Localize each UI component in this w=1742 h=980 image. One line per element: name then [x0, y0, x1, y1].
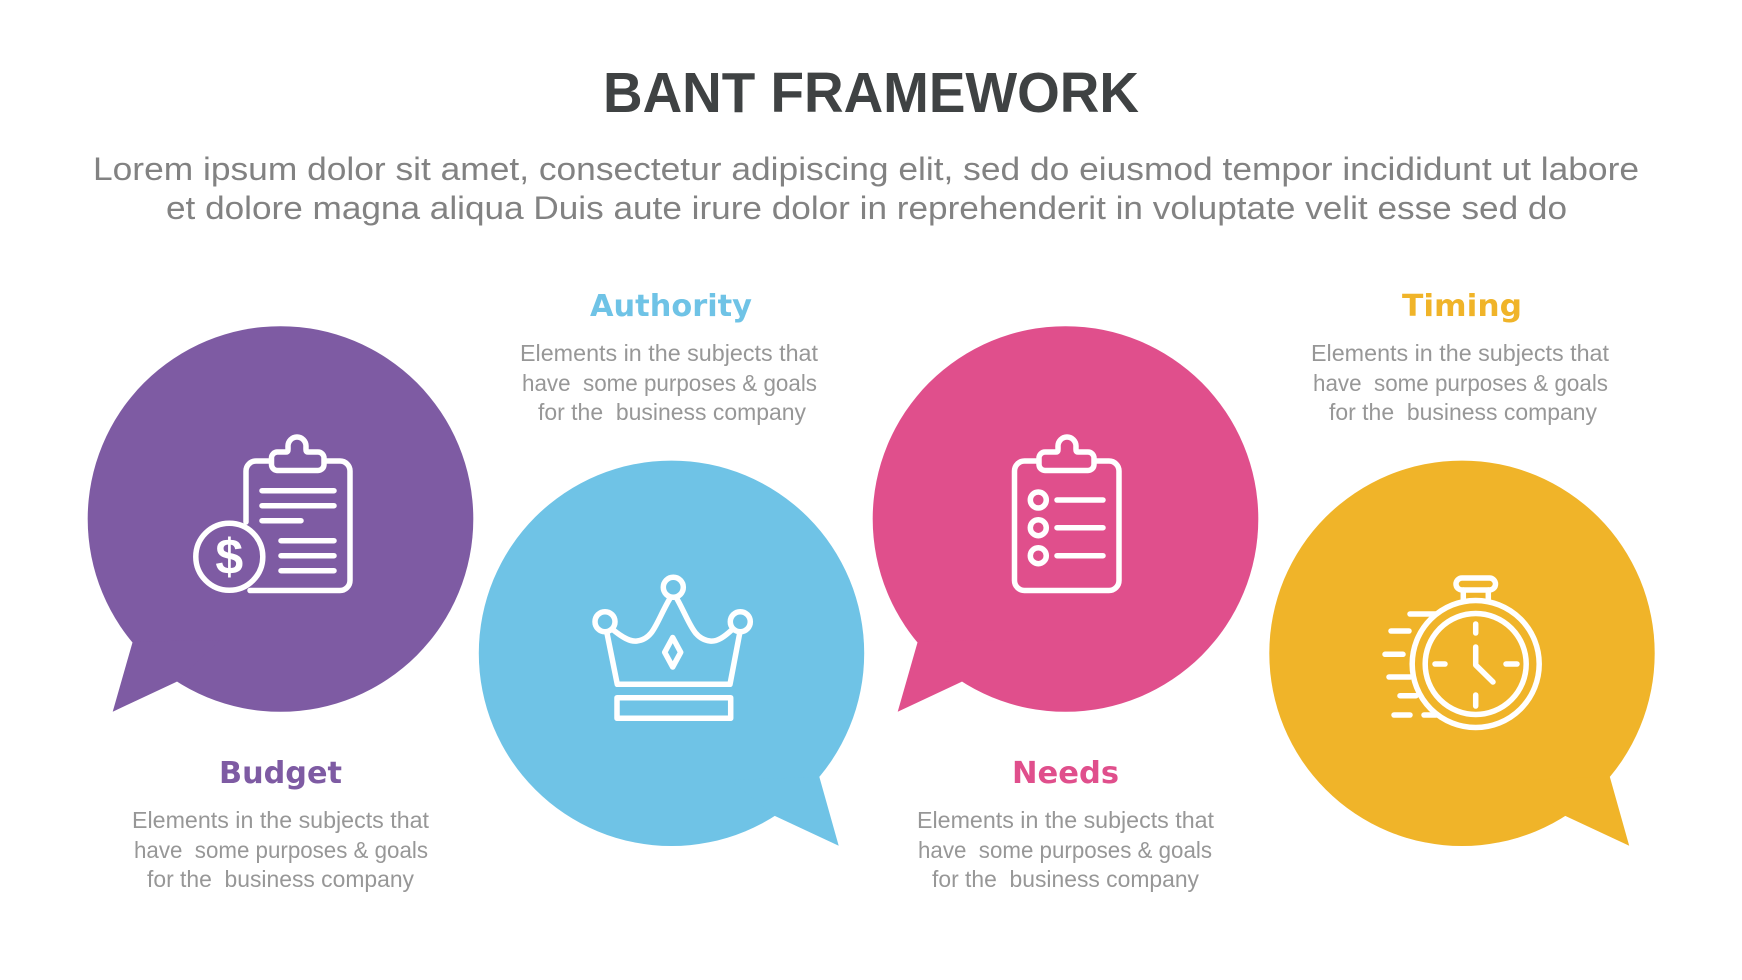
- description: authority: Elements in the subjects that: [520, 340, 819, 366]
- speech bubble: authority: [479, 461, 864, 846]
- description: needs: Elements in the subjects that: [917, 807, 1215, 833]
- description: budget: Elements in the subjects that: [132, 807, 430, 833]
- icon: checklist clipboard: [1014, 437, 1119, 590]
- icon: crown: [595, 577, 750, 718]
- heading: needs: Needs: [1012, 756, 1119, 791]
- description: needs: for the business company: [932, 866, 1199, 892]
- icon: clipboard with dollar coin: [196, 437, 350, 590]
- heading: timing: Timing: [1402, 289, 1522, 324]
- description: budget: have some purposes & goals: [134, 837, 428, 863]
- description: budget: for the business company: [147, 866, 414, 892]
- description: timing: have some purposes & goals: [1313, 370, 1608, 396]
- speech bubble: timing: [1269, 461, 1655, 846]
- panel: timing: [1269, 289, 1655, 846]
- subtitle text: Lorem ipsum dolor sit amet, consectetur adipiscing elit, sed do eiusmod tempor incididunt ut labore: [93, 151, 1639, 187]
- description: timing: [1311, 340, 1610, 425]
- icon: clipboard with dollar coin: $: [215, 529, 243, 585]
- description: budget: [132, 807, 430, 892]
- description: timing: for the business company: [1329, 399, 1597, 425]
- description: authority: [520, 340, 819, 425]
- panel: authority: [479, 289, 864, 846]
- description: authority: for the business company: [538, 399, 806, 425]
- subtitle text: et dolore magna aliqua Duis aute irure dolor in reprehenderit in voluptate velit esse sed do: [166, 190, 1567, 226]
- panel: budget: [88, 326, 473, 892]
- subtitle text: [93, 151, 1639, 226]
- description: needs: have some purposes & goals: [918, 837, 1212, 863]
- title: BANT FRAMEWORK: [603, 61, 1139, 125]
- icon: stopwatch: [1385, 578, 1539, 728]
- description: timing: Elements in the subjects that: [1311, 340, 1610, 366]
- speech bubble: budget: [88, 326, 473, 712]
- heading: authority: Authority: [590, 289, 752, 324]
- speech bubble: needs: [873, 326, 1258, 712]
- panel: needs: [873, 326, 1258, 892]
- description: needs: [917, 807, 1215, 892]
- description: authority: have some purposes & goals: [522, 370, 817, 396]
- heading: budget: Budget: [219, 756, 342, 791]
